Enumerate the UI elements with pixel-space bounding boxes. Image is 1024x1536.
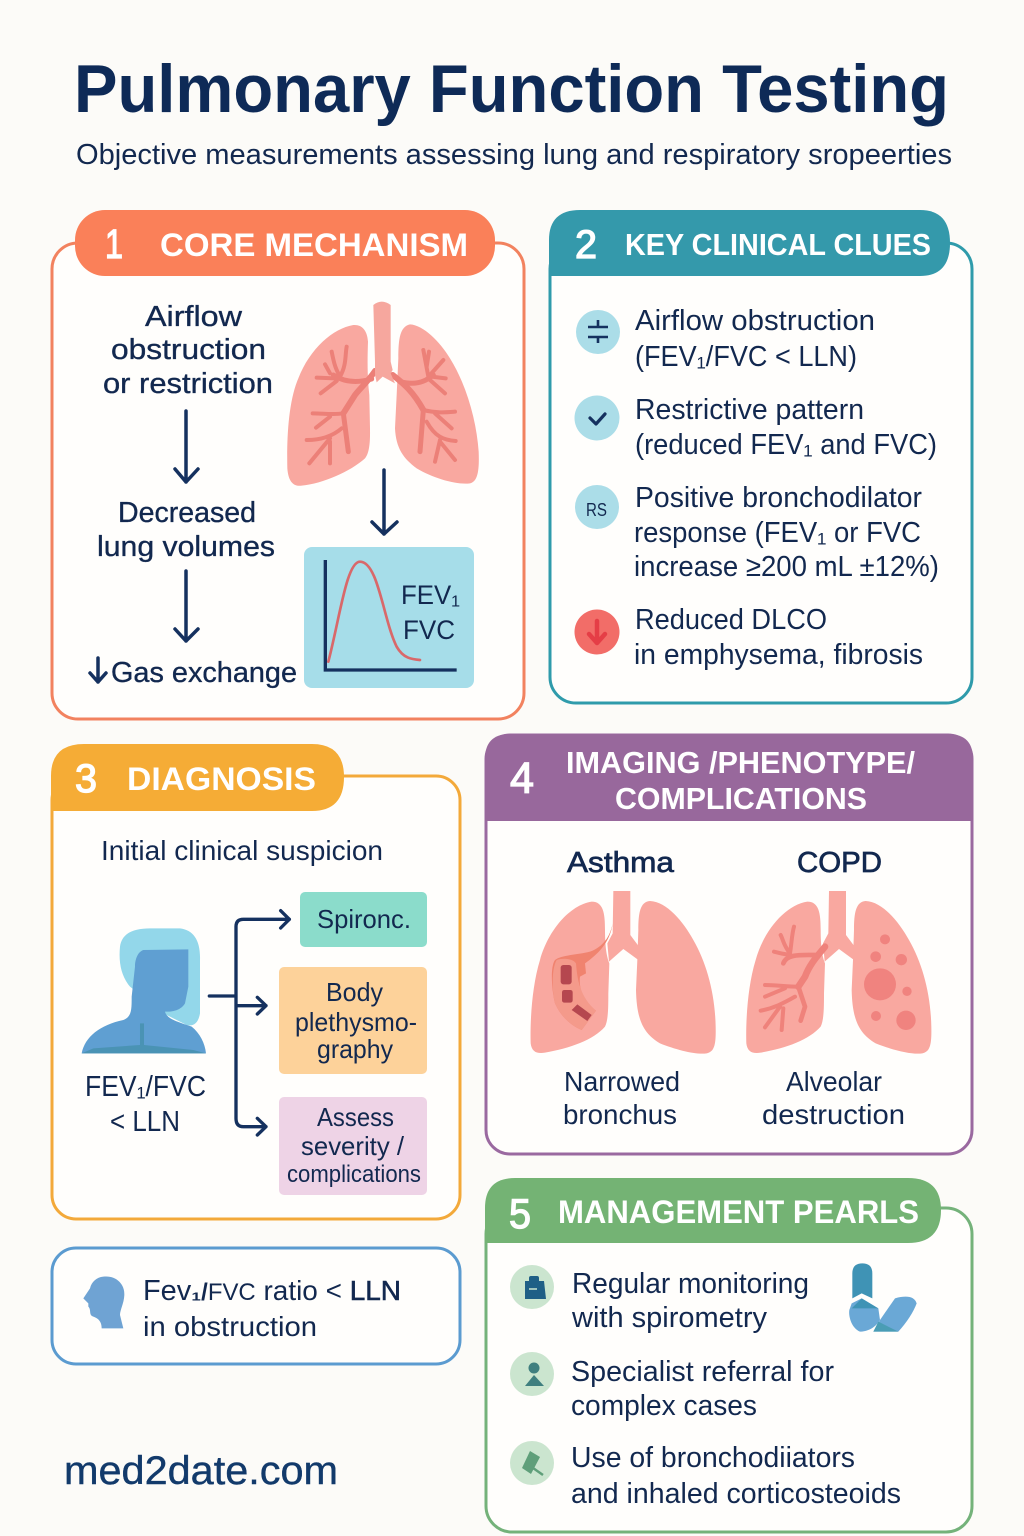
text: airflow obstruction or restriction	[103, 301, 273, 400]
clue: bronchodilator response: increase ≥200 mL ±12%)	[634, 551, 939, 583]
heading: management pearls	[485, 1178, 941, 1243]
box: assess severity: severity /	[301, 1131, 405, 1161]
pearl: monitoring: Regular monitoring	[572, 1268, 809, 1300]
box: assess severity	[279, 1097, 427, 1195]
heading: core mechanism: 1	[105, 221, 123, 267]
icon: inhaler	[849, 1263, 917, 1332]
callout: ratio in obstruction	[52, 1248, 460, 1364]
clue: bronchodilator response	[575, 482, 939, 583]
heading: imaging phenotype complications: COMPLICATIONS	[615, 781, 867, 816]
clue: restrictive pattern: (reduced FEV₁ and FVC)	[635, 429, 937, 461]
panel: imaging phenotype complications	[485, 734, 973, 1154]
pearl: specialist referral: complex cases	[571, 1390, 757, 1422]
box: body plethysmography: graphy	[317, 1034, 393, 1064]
text: FEV1/FVC below LLN	[85, 1071, 206, 1138]
heading: management pearls: 5	[509, 1190, 531, 1237]
clue: bronchodilator response: RS	[586, 500, 607, 520]
pearl: monitoring	[510, 1265, 809, 1334]
pearl: inhaled therapy	[510, 1441, 901, 1510]
clue: restrictive pattern: Restrictive pattern	[635, 394, 864, 426]
text: airflow obstruction or restriction: or restriction	[103, 368, 273, 400]
icon: patient silhouette	[82, 928, 206, 1053]
caption: alveolar destruction: destruction	[762, 1099, 905, 1130]
text: decreased lung volumes: lung volumes	[97, 531, 275, 563]
icon: lungs	[287, 302, 479, 486]
clue: restrictive pattern	[574, 394, 937, 461]
clue: reduced DLCO	[574, 604, 923, 671]
label: COPD: COPD	[797, 847, 882, 879]
icon: COPD lungs with alveolar destruction	[746, 891, 931, 1054]
box: body plethysmography: plethysmo-	[295, 1007, 417, 1037]
heading: key clinical clues	[549, 210, 950, 276]
text: decreased lung volumes: Decreased	[118, 497, 256, 529]
panel: key clinical clues	[549, 210, 972, 703]
caption: narrowed bronchus	[563, 1066, 680, 1130]
arrow: lungs to spirogram	[372, 470, 397, 534]
arrow: down to gas exchange	[175, 571, 198, 641]
clue: airflow obstruction	[576, 305, 875, 373]
heading: imaging phenotype complications: 4	[510, 754, 534, 803]
text: decreased lung volumes	[97, 497, 275, 563]
box: body plethysmography: Body	[326, 977, 383, 1007]
heading: key clinical clues: 2	[575, 223, 597, 267]
heading: imaging phenotype complications	[485, 734, 973, 821]
heading: imaging phenotype complications: IMAGING /PHENOTYPE/	[566, 745, 915, 780]
pearl: inhaled therapy: and inhaled corticosteoids	[571, 1478, 901, 1510]
text: ratio statement: Fev₁/FVC ratio < LLN	[143, 1275, 401, 1307]
pearl: monitoring: with spirometry	[571, 1302, 767, 1334]
panel: diagnosis	[51, 744, 460, 1219]
text: ratio statement	[143, 1275, 401, 1342]
clue: reduced DLCO: Reduced DLCO	[635, 604, 827, 636]
heading: management pearls: MANAGEMENT PEARLS	[558, 1194, 919, 1230]
pearl: specialist referral: Specialist referral for	[571, 1356, 834, 1388]
text: airflow obstruction or restriction: Airflow	[145, 301, 243, 333]
chart: spirometry curve	[304, 547, 474, 688]
box: assess severity: Assess	[317, 1102, 394, 1132]
caption: alveolar destruction	[762, 1066, 905, 1130]
clue: airflow obstruction: (FEV₁/FVC < LLN)	[635, 341, 857, 373]
arrow: branching pathways	[209, 911, 289, 1135]
clue: bronchodilator response: Positive bronchodilator	[635, 482, 922, 514]
box: assess severity: complications	[287, 1161, 421, 1188]
label: asthma: Asthma	[567, 847, 675, 879]
heading: diagnosis: DIAGNOSIS	[127, 761, 316, 797]
text: initial clinical suspicion: Initial clinical suspicion	[101, 835, 383, 866]
text: ratio statement: in obstruction	[143, 1311, 317, 1342]
panel: management pearls	[485, 1178, 972, 1532]
heading: diagnosis	[51, 744, 344, 811]
text: decreased gas exchange: Gas exchange	[111, 657, 297, 689]
text: airflow obstruction or restriction: obstruction	[111, 334, 266, 366]
clue: reduced DLCO: in emphysema, fibrosis	[634, 639, 923, 671]
heading: diagnosis: 3	[75, 757, 97, 801]
pearl: specialist referral	[510, 1352, 834, 1422]
title: Pulmonary Function Testing	[74, 51, 949, 127]
heading: core mechanism	[75, 210, 495, 276]
caption: narrowed bronchus: bronchus	[563, 1099, 677, 1130]
clue: airflow obstruction: Airflow obstruction	[635, 305, 875, 337]
box: spirometry: Spironc.	[317, 904, 411, 934]
heading: key clinical clues: KEY CLINICAL CLUES	[625, 227, 931, 262]
caption: alveolar destruction: Alveolar	[786, 1066, 882, 1097]
box: spirometry	[300, 892, 427, 947]
pearl: inhaled therapy: Use of bronchodiiators	[571, 1442, 855, 1474]
arrow: down to lung volumes	[175, 411, 198, 482]
subtitle: Objective measurements assessing lung and respiratory sropeerties	[76, 139, 952, 171]
box: body plethysmography	[279, 967, 427, 1074]
panel: core mechanism	[52, 210, 524, 719]
icon: head profile	[83, 1276, 124, 1328]
footer: website: med2date.com	[64, 1449, 338, 1493]
text: FEV1/FVC below LLN: < LLN	[110, 1106, 180, 1138]
clue: bronchodilator response: response (FEV₁ or FVC	[634, 517, 921, 549]
chart: spirometry curve: FEV₁	[401, 580, 460, 610]
heading: core mechanism: CORE MECHANISM	[160, 227, 468, 263]
text: FEV1/FVC below LLN: FEV₁/FVC	[85, 1071, 206, 1103]
icon: asthma lungs with narrowed bronchus	[531, 891, 716, 1054]
caption: narrowed bronchus: Narrowed	[564, 1066, 680, 1097]
chart: spirometry curve: FVC	[403, 615, 455, 645]
